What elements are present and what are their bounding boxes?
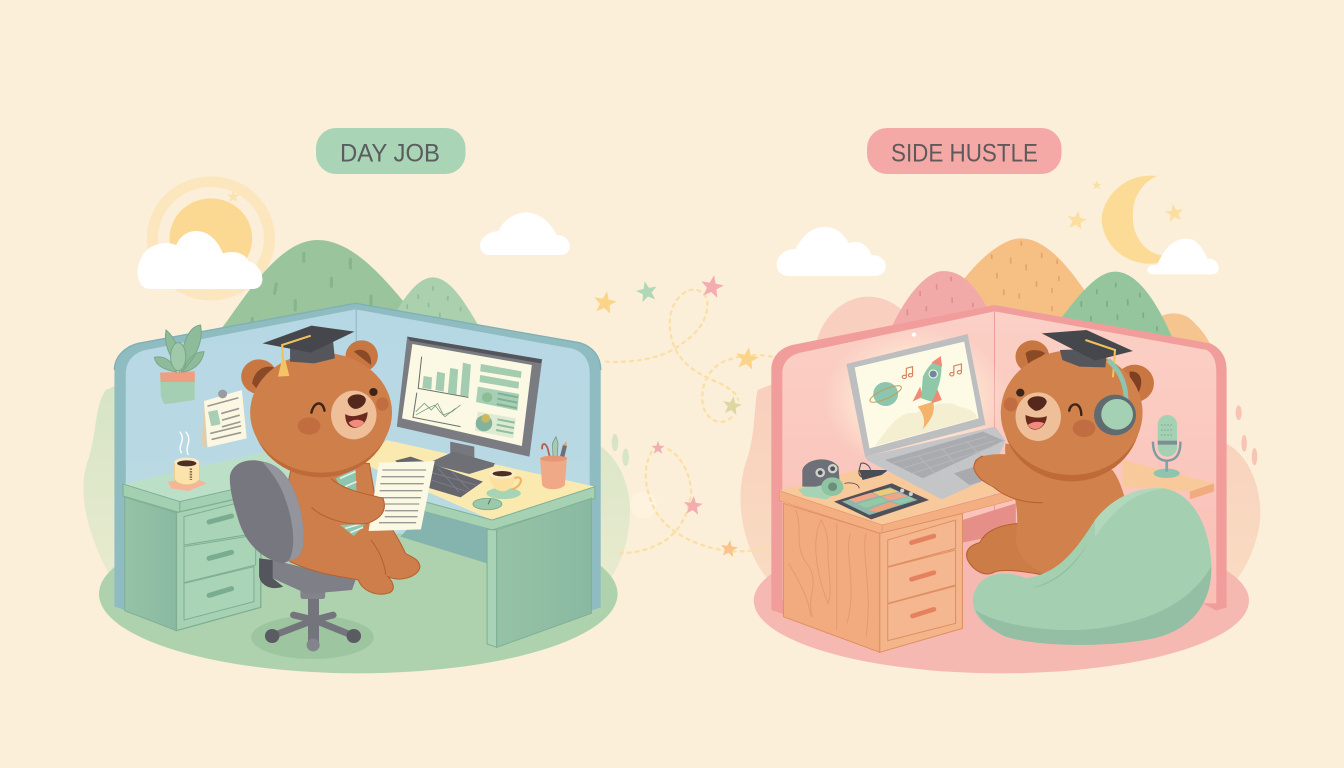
laptop lid [846,334,986,457]
cubicle wall [114,303,601,611]
eyes [1016,389,1024,397]
right desk top [362,440,595,563]
ear right [1115,365,1154,402]
pencil holder [540,437,567,489]
floor patch under desk [252,533,488,645]
ear left [1015,340,1049,373]
arm [300,470,384,524]
head [252,355,390,477]
icon: sun [152,182,269,295]
floor [99,515,618,673]
monitor [397,337,542,474]
hill: large green [218,240,411,333]
bear: day job [241,326,435,594]
scene: day job cubicle [83,182,630,673]
head [1003,353,1141,481]
icon: cloud left [138,231,262,289]
screen planet [868,382,903,406]
tablet [834,483,929,519]
desk drawers [880,513,962,652]
icon: crescent moon [1102,176,1177,264]
hill: orange [961,238,1086,320]
hill: small green [395,277,481,330]
ear right [346,340,378,372]
necktie [336,468,366,536]
keyboard [395,457,483,497]
desk wood panel [783,503,880,652]
headphones cable [859,463,888,480]
star: pink top [699,273,725,299]
icon: cloud left [777,227,886,276]
star: olive middle [721,395,743,416]
arm [974,454,1043,503]
star: orange top [592,289,618,315]
floor [754,528,1249,673]
star: green top [634,279,659,303]
graduation cap [1042,330,1133,377]
star: orange middle [734,345,760,371]
pale glow [630,492,657,518]
left drawers [125,493,261,631]
screen bar chart [418,357,471,397]
hill: green [1062,272,1173,338]
camera [798,459,859,499]
eyes [311,403,325,413]
ear left [241,359,277,394]
coffee cup on coaster [168,432,207,491]
left desk top [123,453,321,513]
label: day job [316,128,466,174]
scene: side hustle cubicle [741,176,1260,673]
body [1005,443,1126,578]
label: side hustle: SIDE HUSTLE [891,140,1038,168]
icon: cloud right [480,213,570,255]
nose and mouth [348,394,366,409]
desk top [779,470,1019,534]
right desk leg [487,498,591,647]
muzzle [331,391,377,439]
icon: potted plant [154,325,204,404]
cheeks [298,417,320,435]
icon: cloud right [1147,239,1219,274]
screen rocket [913,356,942,430]
screen panels [475,364,522,438]
soft green backdrop [83,383,630,583]
star: orange lower [720,539,739,557]
muzzle [1015,392,1061,441]
laptop base [865,427,1006,499]
office chair back [230,460,304,563]
hill: orange small [1160,313,1210,345]
bear: side hustle [967,330,1154,579]
rain drops on backdrop [1236,405,1257,465]
nose and mouth [1028,396,1047,411]
star: pink small [651,441,665,454]
laptop glow [823,328,1009,472]
soft pink backdrop [741,383,1260,590]
star: pink lower [683,495,703,515]
note pinned on wall [201,390,247,447]
desk clock [473,498,502,510]
label: day job: DAY JOB [340,140,440,168]
screen cloud [875,403,977,446]
paper [369,461,435,531]
cubicle wall [771,305,1227,614]
dashed trails [606,290,772,553]
chair base [251,558,374,659]
laptop [846,333,1006,499]
connector: dashed star trails [606,290,772,553]
floor patch [937,532,1216,650]
side shelf desk [1123,460,1214,499]
bear body [286,463,420,594]
graduation cap [263,326,354,377]
hill: pink [892,271,988,327]
music notes [902,364,961,379]
screen line chart [413,393,461,427]
leg [967,523,1088,579]
coffee mug [486,469,521,499]
icon: moon stars [1066,181,1184,230]
back hill: pale pink [816,297,902,343]
microphone [1153,415,1180,478]
floor under desk [962,503,1016,543]
cheeks [1004,397,1018,411]
headphones [1094,360,1136,435]
green droplets [612,434,629,466]
label: side hustle [867,128,1062,174]
beanbag [973,488,1211,645]
